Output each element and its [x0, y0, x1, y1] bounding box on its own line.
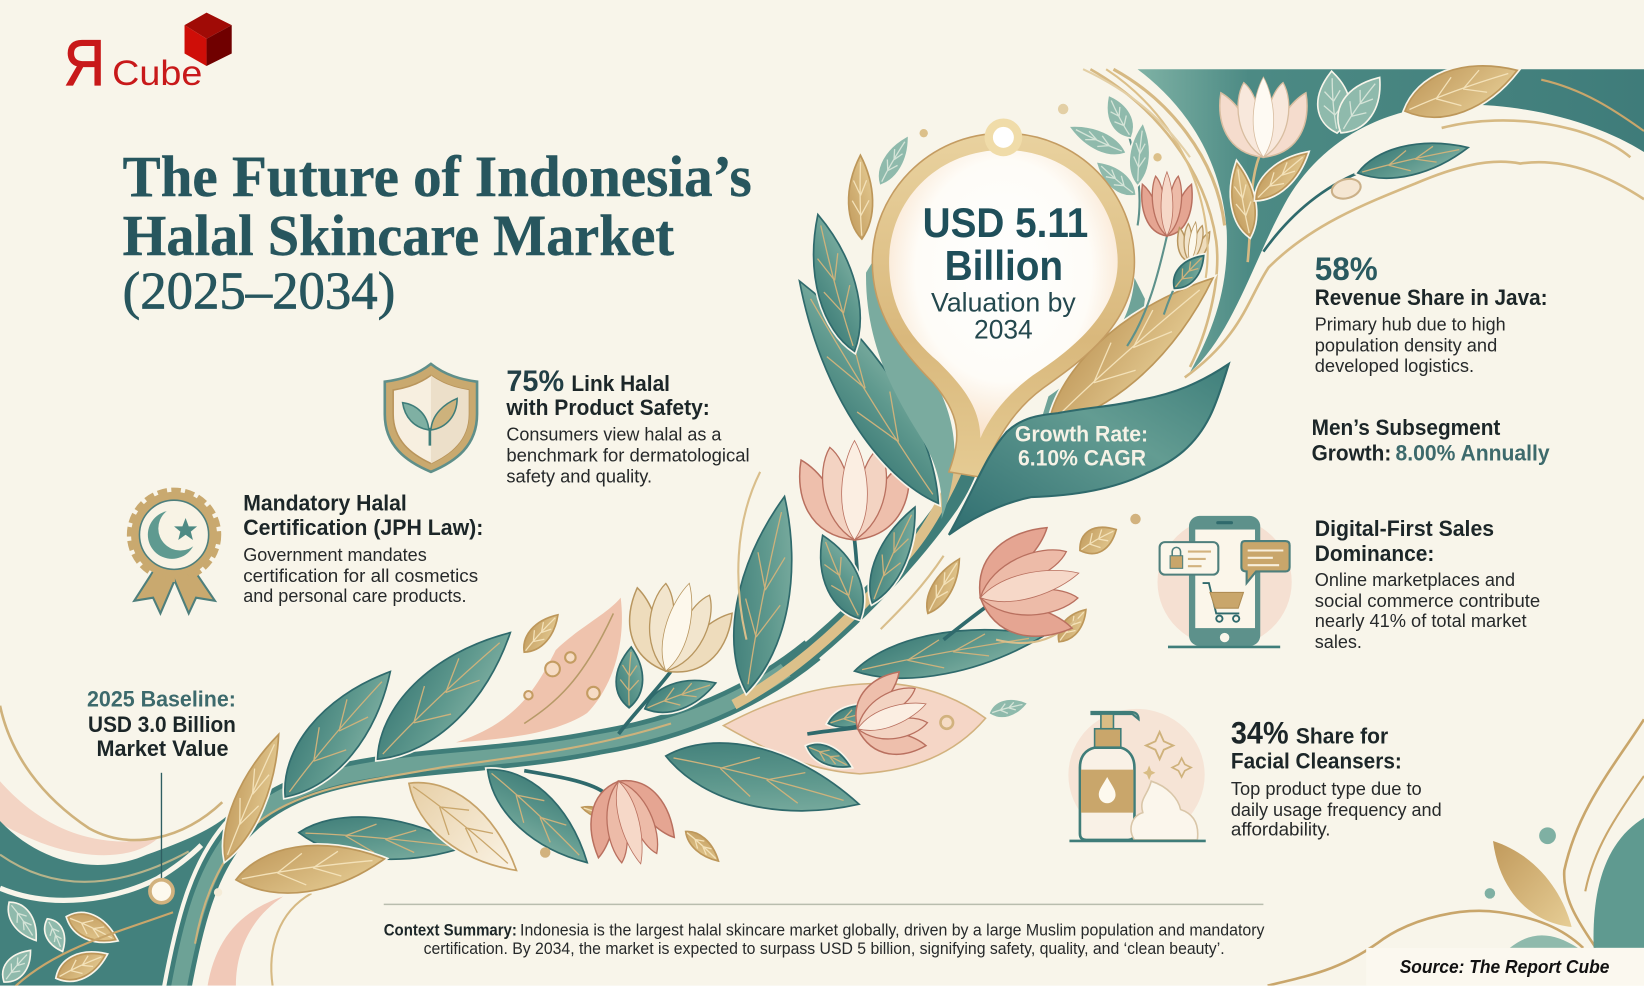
- text: facial cleansers: Top product type due to: [1231, 778, 1422, 799]
- text: product safety: safety and quality.: [506, 465, 652, 486]
- context summary: certification. By 2034, the market is expected to surpass USD 5 billion, signifying safety, quality, and ‘clean beauty’.: [424, 940, 1225, 958]
- text: 2025 baseline: 2025 Baseline:: [87, 687, 236, 712]
- pink leaf backgrounds: [456, 598, 986, 774]
- text: digital first: Online marketplaces and: [1315, 569, 1515, 590]
- title: (2025–2034): [123, 262, 395, 320]
- text: java share: Primary hub due to high: [1315, 313, 1506, 334]
- context summary: Context Summary:: [384, 921, 517, 939]
- decoration: top right teal swoosh: [1090, 49, 1644, 377]
- icon: shield: [385, 364, 477, 472]
- text: digital first: nearly 41% of total market: [1315, 610, 1527, 631]
- text: product safety: [505, 365, 750, 486]
- text: java share: developed logistics.: [1315, 355, 1474, 376]
- valuation text: [923, 199, 1088, 345]
- main vine stem: [178, 414, 980, 991]
- text: product safety: 75%: [506, 365, 564, 398]
- valuation bulb: [872, 118, 1134, 477]
- text: product safety: Consumers view halal as a: [506, 423, 722, 444]
- text: 2025 baseline: USD 3.0 Billion: [88, 712, 236, 737]
- text: men's subsegment: Men’s Subsegment: [1312, 415, 1501, 440]
- text: facial cleansers: [1231, 715, 1442, 840]
- text: digital first: social commerce contribute: [1315, 590, 1540, 611]
- text: mandatory certification: certification for all cosmetics: [243, 565, 478, 586]
- logo: [64, 13, 232, 99]
- source note: Source: The Report Cube: [1400, 956, 1609, 977]
- logo: Я: [64, 26, 105, 99]
- text: mandatory certification: Mandatory Halal: [243, 491, 407, 516]
- growth rate text: 6.10% CAGR: [1018, 446, 1146, 471]
- leaves along vine: [212, 472, 1141, 901]
- text: mandatory certification: Certification (JPH Law):: [243, 515, 483, 540]
- title: The Future of Indonesia’s: [123, 144, 752, 209]
- text: product safety: Link Halal: [571, 371, 670, 396]
- text: java share: 58%: [1315, 251, 1378, 287]
- text: digital first: [1315, 516, 1540, 652]
- flowers on vine: [524, 441, 1092, 874]
- text: digital first: Digital-First Sales: [1315, 516, 1494, 541]
- valuation text: 2034: [974, 314, 1033, 345]
- text: facial cleansers: 34%: [1231, 715, 1289, 750]
- text: digital first: Dominance:: [1315, 541, 1434, 566]
- text: men's subsegment: [1312, 415, 1550, 465]
- title: [123, 144, 752, 320]
- source note: [1366, 948, 1644, 986]
- text: 2025 baseline: [87, 687, 236, 761]
- growth rate text: [1015, 421, 1148, 471]
- text: mandatory certification: and personal care products.: [243, 585, 467, 606]
- growth rate text: Growth Rate:: [1015, 421, 1148, 446]
- icon: certification badge: [130, 491, 218, 613]
- growth rate leaf: [949, 364, 1229, 535]
- context summary: Indonesia is the largest halal skincare market globally, driven by a large Muslim population and mandatory: [520, 921, 1265, 939]
- decoration: bottom right leaves: [1268, 719, 1644, 986]
- text: men's subsegment: 8.00% Annually: [1396, 440, 1550, 465]
- text: facial cleansers: Share for: [1296, 723, 1389, 748]
- icon: cleanser bottle: [1068, 709, 1206, 841]
- text: product safety: with Product Safety:: [505, 395, 710, 420]
- baseline marker: [150, 773, 222, 903]
- text: mandatory certification: Government mandates: [243, 544, 427, 565]
- decoration: bottom white band: [0, 986, 1644, 993]
- context summary: [384, 904, 1265, 958]
- valuation text: Billion: [945, 242, 1063, 289]
- decoration: bottom left teal swoosh: [0, 706, 311, 991]
- title: Halal Skincare Market: [123, 203, 675, 268]
- valuation text: USD 5.11: [923, 199, 1088, 246]
- decoration: upper sprigs around the valuation bulb: [775, 69, 1230, 519]
- text: facial cleansers: Facial Cleansers:: [1231, 749, 1402, 774]
- text: 2025 baseline: Market Value: [96, 736, 229, 761]
- text: facial cleansers: affordability.: [1231, 819, 1331, 840]
- text: digital first: sales.: [1315, 631, 1362, 652]
- text: product safety: benchmark for dermatological: [506, 444, 750, 465]
- logo: Cube: [112, 53, 202, 93]
- text: mandatory certification: [243, 491, 483, 606]
- text: java share: [1315, 251, 1548, 376]
- icon: phone with shopping: [1158, 516, 1292, 647]
- text: java share: population density and: [1315, 334, 1497, 355]
- text: java share: Revenue Share in Java:: [1315, 285, 1548, 310]
- text: facial cleansers: daily usage frequency and: [1231, 799, 1442, 820]
- valuation text: Valuation by: [931, 286, 1076, 317]
- text: men's subsegment: Growth:: [1312, 440, 1391, 465]
